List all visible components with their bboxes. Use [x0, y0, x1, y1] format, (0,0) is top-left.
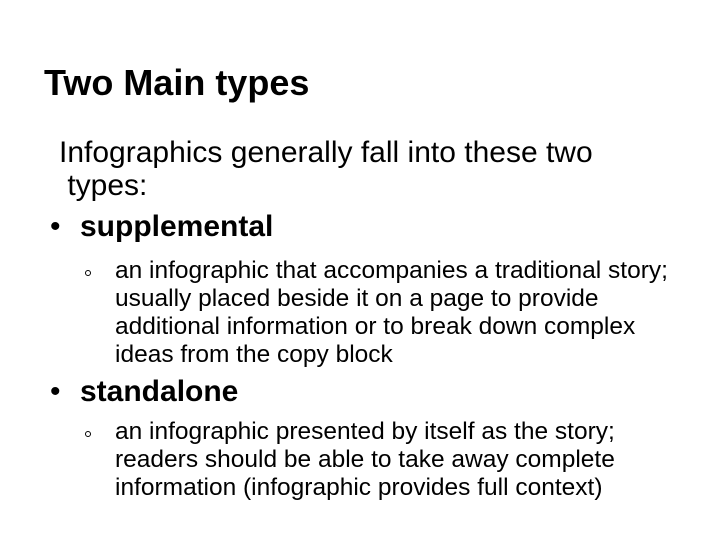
sub text: supplemental description: ideas from the copy block	[115, 341, 393, 368]
intro text	[59, 136, 593, 202]
bullet: supplemental: supplemental	[80, 210, 273, 243]
sub text: supplemental description: usually placed beside it on a page to provide	[115, 285, 599, 312]
sub text: standalone description: an infographic presented by itself as the story;	[115, 418, 615, 445]
sub text: standalone description	[85, 418, 615, 501]
intro text: types:	[67, 169, 147, 202]
sub text: supplemental description: an infographic that accompanies a traditional story;	[115, 257, 668, 284]
bullet: supplemental: •	[50, 210, 61, 243]
bullet: standalone: standalone	[80, 375, 238, 408]
sub text: supplemental description	[85, 257, 668, 368]
sub text: standalone description: information (infographic provides full context)	[115, 474, 603, 501]
sub text: standalone description: readers should be able to take away complete	[115, 446, 615, 473]
intro text: Infographics generally fall into these two	[59, 136, 593, 169]
sub text: supplemental description: additional information or to break down complex	[115, 313, 635, 340]
bullet: standalone: •	[50, 375, 61, 408]
title: Two Main types	[44, 62, 309, 103]
